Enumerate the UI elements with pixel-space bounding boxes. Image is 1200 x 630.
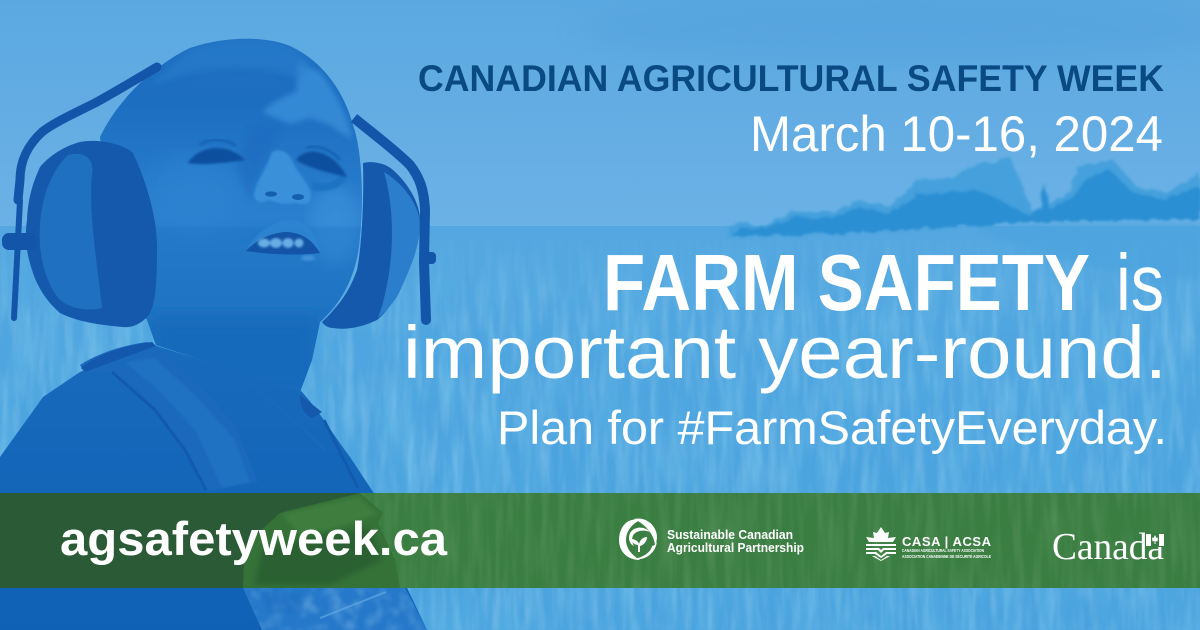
boy head and neck [100,39,362,392]
collar [300,395,322,418]
CASA ACSA wordmark: CASA | ACSA [902,534,992,549]
right ear cup [322,162,420,329]
right eye [296,152,347,177]
logo: Sustainable Canadian Agricultural Partnership: Agricultural Partnership [667,540,804,555]
website url: agsafetyweek.ca [60,512,448,565]
logo: Canada wordmark: Canada [1052,526,1164,568]
denim pocket seen through band [243,493,400,588]
logo: CASA ACSA: ASSOCIATION CANADIENNE DE SÉCURITÉ AGRICOLE [902,552,991,559]
icon: maple leaf and book [866,527,896,561]
left ear cup [26,141,157,327]
dark body seen through band [0,493,360,588]
logo: Sustainable Canadian Agricultural Partnership [619,518,804,560]
green band [0,493,1200,588]
CASA full names: CANADIAN AGRICULTURAL SAFETY ASSOCIATION [902,548,984,553]
nose [254,150,311,204]
photo: boy with ear protection [0,39,436,630]
jeans below band [243,588,427,630]
icon: swirl with seedling [619,518,657,560]
headline: is: is [1116,238,1164,327]
right headband and stem [354,118,425,262]
partnership name: Sustainable Canadian [667,527,793,542]
logo: CASA ACSA [866,527,992,561]
lower lip [301,255,315,261]
mouth and teeth [246,232,320,254]
left headband and stem [18,67,157,200]
left eye [188,148,245,164]
distant tree line [727,157,1200,236]
headline: important year-round: important year-round. [403,311,1167,394]
headline: farm safety: FARM SAFETY [603,238,1090,327]
icon: Canadian flag [1145,533,1165,547]
heading: event name: CANADIAN AGRICULTURAL SAFETY WEEK [418,58,1164,99]
boy torso and shirt [0,344,427,630]
face shading and facial features [147,58,359,390]
call to action hashtag: Plan for #FarmSafetyEveryday. [497,401,1167,454]
overall strap [80,342,258,491]
upper lip [246,220,320,252]
event dates: March 10-16, 2024 [750,106,1163,162]
